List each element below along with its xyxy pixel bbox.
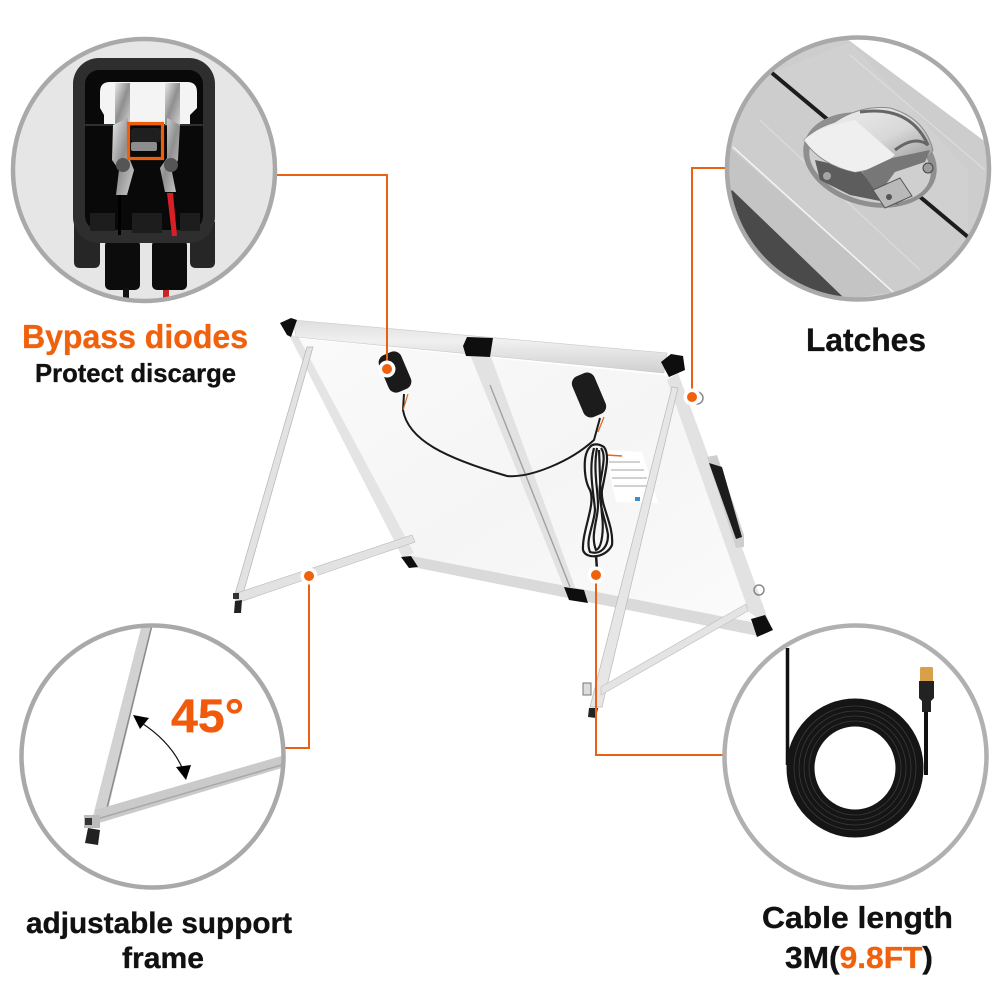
- top frame bar: [293, 320, 667, 373]
- angle value: 45°: [171, 689, 244, 742]
- right cross brace: [601, 604, 748, 695]
- heading: cable length: 3M(9.8FT): [785, 940, 933, 975]
- angle arrow: [133, 715, 191, 780]
- panel: latch circle: [724, 35, 992, 302]
- panel: solar panel rear view: [233, 318, 773, 718]
- junction box 1: [376, 349, 414, 395]
- left foot: [234, 600, 242, 613]
- bottom compartments: [90, 213, 200, 233]
- foot: [84, 815, 100, 845]
- coiled cable: [788, 648, 926, 830]
- junction box body: [73, 58, 215, 243]
- connector: latches: [684, 168, 725, 406]
- upright strut: [93, 620, 154, 818]
- highlight box: [128, 124, 162, 158]
- connector: cable length: [588, 566, 723, 755]
- left frame edge: [288, 333, 414, 558]
- text: protect discarge: Protect discarge: [35, 358, 236, 388]
- panel: cable length circle: [724, 626, 986, 888]
- heading: adjustable support frame: frame: [122, 942, 204, 975]
- heading: cable length: Cable length: [762, 900, 953, 935]
- highlight line: [733, 147, 893, 292]
- side tabs: [74, 222, 215, 268]
- diagonal strut: [95, 755, 285, 823]
- interconnect cable: [403, 394, 600, 476]
- side latch hardware: [691, 392, 764, 595]
- back sheet: [295, 338, 769, 633]
- metal terminals: [112, 83, 180, 195]
- panel: bypass diode junction box circle: [13, 39, 275, 301]
- connector plugs: [105, 240, 187, 300]
- product label: [605, 450, 658, 503]
- left cross brace: [234, 535, 415, 603]
- heading: adjustable support frame: [26, 907, 292, 975]
- coiled cable: [583, 444, 612, 570]
- panel: support frame angle circle: [22, 620, 285, 888]
- hasp: [823, 150, 933, 208]
- junction box 2: [569, 370, 609, 420]
- folding handle: [707, 455, 744, 548]
- wires: [118, 195, 121, 235]
- latch hood: [804, 108, 933, 172]
- diode: [131, 128, 161, 142]
- heading: latches: Latches: [806, 322, 926, 358]
- heading: cable length: [762, 900, 953, 975]
- bottom frame bar: [408, 556, 758, 636]
- dark solar cell: [731, 190, 842, 296]
- latch interior: [815, 160, 900, 205]
- plug: [919, 667, 934, 712]
- heading: bypass diodes: Bypass diodes: [22, 318, 248, 355]
- corner caps: [280, 318, 773, 637]
- centre hinge strut: [471, 357, 576, 590]
- connector: bypass diodes: [277, 175, 396, 378]
- connector: support frame: [285, 568, 318, 748]
- latch base: [803, 112, 937, 208]
- right foot: [588, 708, 598, 718]
- right frame bar: [667, 373, 771, 627]
- aluminium surface: [730, 40, 987, 298]
- slot: [772, 73, 968, 237]
- right support leg: [590, 387, 678, 707]
- left support leg: [235, 347, 313, 594]
- heading: adjustable support frame: adjustable support: [26, 907, 292, 940]
